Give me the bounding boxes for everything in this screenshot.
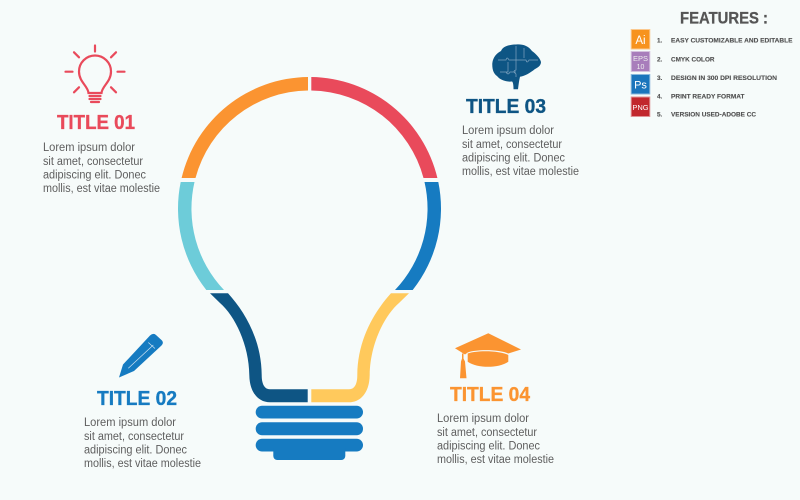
icon: Ai badge [631,30,650,49]
feature list: DESIGN IN 300 DPI RESOLUTION [671,75,777,82]
icon: PNG badge [631,97,650,116]
feature list: 4. [657,93,663,100]
text block: adipiscing elit. Donec [84,444,187,456]
panel: title 04 [437,333,554,466]
text block [437,413,554,466]
text block: adipiscing elit. Donec [43,170,146,182]
feature list: 5. [657,112,663,119]
text block: adipiscing elit. Donec [462,152,565,164]
icon: Ps badge [631,74,650,94]
bulb segment: blue [395,182,441,290]
icon: light bulb [66,46,124,102]
feature list: 2. [657,56,663,64]
heading: TITLE 03 [466,95,546,118]
icon: graduation cap [455,333,521,378]
bulb segment: red [311,77,437,178]
panel: title 02 [84,334,201,470]
feature list: PRINT READY FORMAT [671,93,745,100]
light bulb diagram [178,77,441,460]
icon: EPS badge: 10 [637,64,644,71]
bulb segment: teal [178,182,224,290]
feature list: VERSION USED-ADOBE CC [671,112,756,119]
text block: sit amet, consectetur [43,156,143,168]
heading: TITLE 04 [450,383,531,406]
text block: sit amet, consectetur [84,431,184,443]
text block: sit amet, consectetur [462,139,562,151]
heading: TITLE 01 [57,111,135,134]
text block: Lorem ipsum dolor [462,125,554,137]
text block: mollis, est vitae molestie [437,454,554,466]
feature list: 3. [657,75,663,82]
text block [462,125,579,178]
text block: Lorem ipsum dolor [437,413,529,425]
icon: Ai badge: Ai [635,35,646,47]
panel: title 01 [43,46,160,195]
icon: EPS badge: EPS [633,54,648,63]
text block: Lorem ipsum dolor [84,417,176,429]
text block [43,142,160,195]
feature list: EASY CUSTOMIZABLE AND EDITABLE [671,38,793,45]
text block: mollis, est vitae molestie [84,458,201,470]
panel: title 03 [462,44,579,178]
bulb segment: yellow neck [311,293,409,402]
bulb segment: orange [182,77,308,178]
feature list: CMYK COLOR [671,56,715,64]
heading: TITLE 02 [97,387,177,410]
text block: Lorem ipsum dolor [43,142,135,154]
icon: Ps badge: Ps [634,80,647,92]
icon: pencil [119,334,163,378]
icon: puzzle brain [492,44,541,89]
feature list [657,38,793,119]
icon: PNG badge: PNG [632,103,649,112]
text block: adipiscing elit. Donec [437,440,540,452]
icon: EPS badge [631,52,650,72]
text block: mollis, est vitae molestie [462,166,579,178]
panel: features [631,8,793,119]
features heading: FEATURES : [680,8,768,27]
text block: mollis, est vitae molestie [43,183,160,195]
feature list: 1. [657,38,663,45]
bulb base [256,406,363,460]
text block: sit amet, consectetur [437,427,537,439]
bulb segment: dark blue neck [210,293,308,402]
text block [84,417,201,470]
